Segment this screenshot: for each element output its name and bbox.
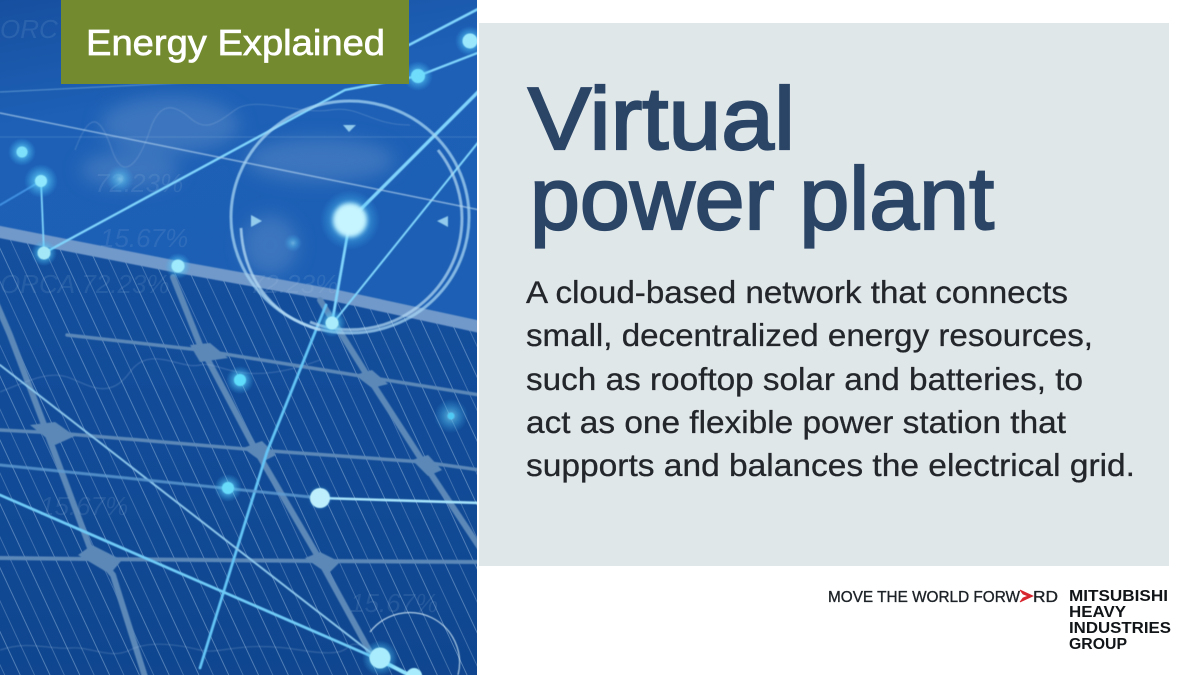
title xyxy=(528,69,994,248)
definition text block: such as rooftop solar and batteries, to xyxy=(526,361,1083,397)
title: Virtual xyxy=(528,69,795,168)
definition text block: act as one flexible power station that xyxy=(526,404,1066,440)
definition text block: supports and balances the electrical grid. xyxy=(526,447,1135,483)
photo: solar panel with network overlay: 15.67% xyxy=(100,223,188,253)
photo: solar panel with network overlay: ORCA 72.23% xyxy=(0,269,170,299)
photo: solar panel with network overlay: ORC xyxy=(0,14,58,44)
glowing network nodes xyxy=(8,26,485,675)
tagline: Move the world forward: MOVE THE WORLD FORW xyxy=(828,589,1021,606)
definition text block: small, decentralized energy resources, xyxy=(526,317,1093,353)
title: power plant xyxy=(530,149,994,248)
logo: Mitsubishi Heavy Industries Group: MITSUBISHI xyxy=(1069,588,1168,605)
definition text block xyxy=(526,274,1135,483)
icon: red arrow xyxy=(1020,590,1033,602)
definition text block: A cloud-based network that connects xyxy=(526,274,1068,310)
ring markers xyxy=(251,125,448,227)
panel: definition background xyxy=(479,23,1169,566)
solar panel cells xyxy=(0,230,480,675)
label banner: Energy Explained xyxy=(61,0,409,84)
logo: Mitsubishi Heavy Industries Group: HEAVY xyxy=(1069,604,1126,621)
circular network rings xyxy=(231,101,469,675)
clouds xyxy=(80,97,395,275)
photo: solar panel with network overlay: 15.67% xyxy=(350,588,438,618)
photo: solar panel with network overlay xyxy=(0,0,485,675)
faint chart lines and figures xyxy=(0,104,410,654)
network lines xyxy=(0,8,480,675)
solar panel bus bars xyxy=(0,231,485,675)
photo: solar panel with network overlay: 72.23% xyxy=(95,168,183,198)
photo: solar panel with network overlay: 15.67% xyxy=(40,491,128,521)
label banner: Energy Explained: Energy Explained xyxy=(86,22,385,63)
logo: Mitsubishi Heavy Industries Group xyxy=(1069,588,1171,653)
photo: solar panel with network overlay: 72.23% xyxy=(250,269,338,299)
logo: Mitsubishi Heavy Industries Group: INDUSTRIES xyxy=(1069,620,1171,637)
sky background xyxy=(0,0,480,345)
logo: Mitsubishi Heavy Industries Group: GROUP xyxy=(1069,636,1127,653)
tagline: Move the world forward: RD xyxy=(1033,589,1058,606)
